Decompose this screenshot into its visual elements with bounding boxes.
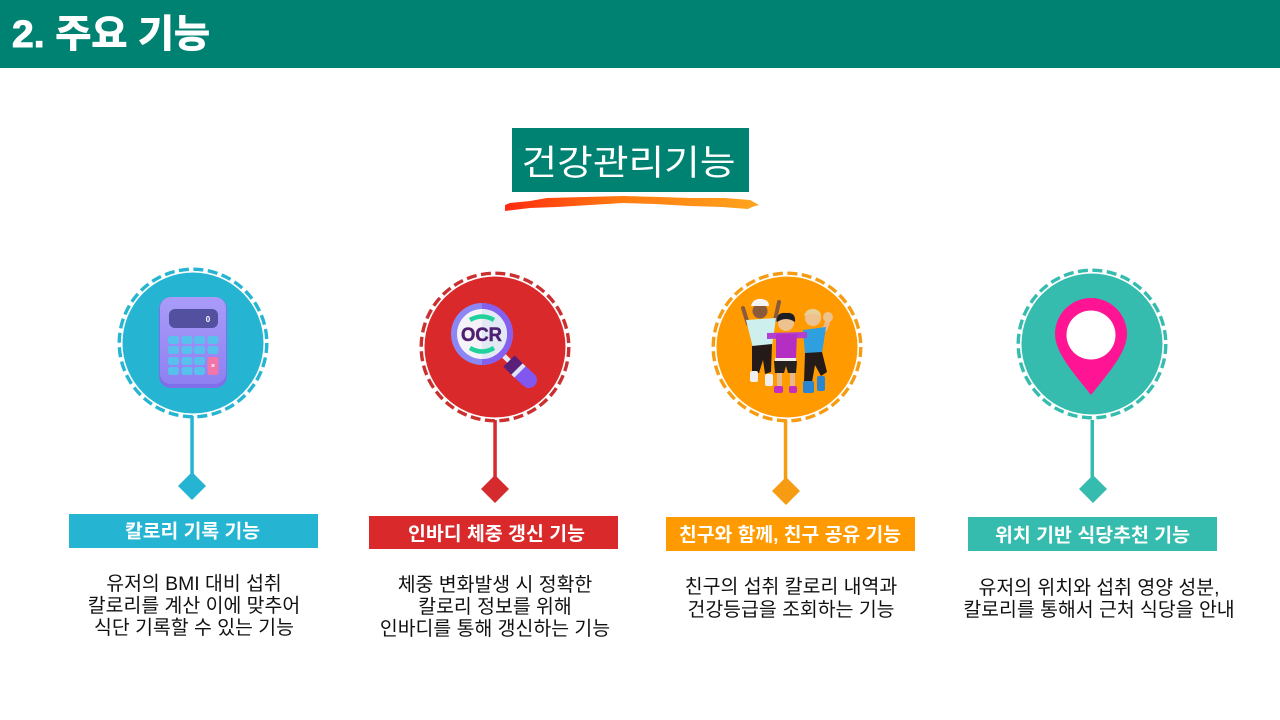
description: 체중 변화발생 시 정확한 [398, 574, 592, 596]
connector line and diamond [1079, 420, 1107, 503]
friend right [803, 309, 833, 393]
connector line and diamond [178, 416, 206, 500]
panel: friend sharing [666, 273, 915, 621]
label [369, 516, 618, 549]
panel: inbody weight update [369, 273, 618, 640]
label: 칼로리 기록 기능 [125, 520, 260, 542]
section heading: 건강관리기능 [522, 144, 736, 183]
section heading [512, 128, 749, 192]
connector line and diamond [481, 420, 509, 503]
label [968, 517, 1217, 551]
description [685, 576, 897, 621]
description: 칼로리를 통해서 근처 식당을 안내 [963, 599, 1235, 621]
description: 유저의 BMI 대비 섭취 [106, 573, 282, 595]
brush underline [505, 196, 759, 211]
description: 인바디를 통해 갱신하는 기능 [380, 618, 610, 640]
icon: OCR magnifier: OCR [461, 325, 502, 346]
label [666, 517, 915, 551]
circle badge [421, 273, 569, 421]
description: 식단 기록할 수 있는 기능 [94, 617, 294, 639]
description: 칼로리 정보를 위해 [418, 596, 572, 618]
icon: calculator: 0 [206, 315, 211, 324]
icon: map pin [1055, 298, 1127, 395]
header bar [0, 0, 1280, 68]
panel: calorie log [69, 269, 318, 639]
description: 유저의 위치와 섭취 영양 성분, [978, 577, 1220, 599]
description [963, 577, 1235, 621]
description [380, 574, 610, 640]
icon: calculator [159, 297, 227, 388]
circle badge [1018, 270, 1166, 418]
friend middle [767, 313, 807, 393]
header title: 2. 주요 기능 [12, 14, 210, 56]
connector line and diamond [772, 420, 800, 505]
description: 건강등급을 조회하는 기능 [687, 599, 895, 621]
circle badge [119, 269, 267, 417]
description: 칼로리를 계산 이에 맞추어 [88, 595, 300, 617]
label [69, 514, 318, 548]
label: 위치 기반 식당추천 기능 [995, 524, 1190, 546]
circle badge [713, 273, 861, 421]
description [88, 573, 300, 639]
friend left [743, 299, 779, 386]
panel: location based restaurant recommendation [963, 270, 1235, 621]
label: 친구와 함께, 친구 공유 기능 [679, 524, 901, 546]
icon: OCR magnifier [451, 303, 529, 380]
description: 친구의 섭취 칼로리 내역과 [685, 576, 897, 598]
label: 인바디 체중 갱신 기능 [408, 523, 585, 545]
icon: three friends [743, 299, 833, 393]
